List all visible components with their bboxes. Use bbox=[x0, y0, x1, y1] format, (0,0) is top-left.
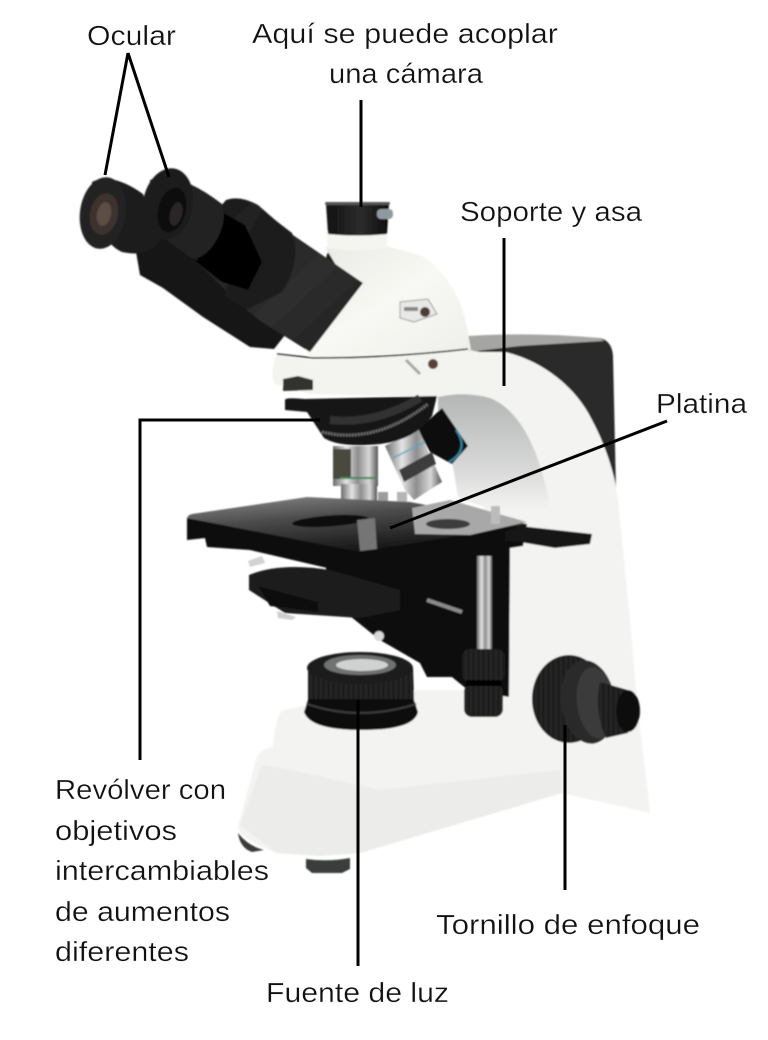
camera port bbox=[325, 202, 393, 236]
coarse focus knobs on column bbox=[462, 649, 505, 717]
black column block bbox=[325, 545, 510, 697]
lever and screw on the arm bbox=[406, 359, 438, 374]
label: platina: Platina bbox=[656, 388, 747, 419]
light source bbox=[304, 652, 418, 730]
label: fuente de luz: Fuente de luz bbox=[266, 977, 449, 1008]
objective: black bbox=[418, 408, 468, 464]
stage bbox=[187, 497, 527, 574]
revolver bbox=[285, 396, 437, 445]
leader line: cámara bbox=[360, 100, 362, 207]
rear black panel of the support bbox=[468, 337, 616, 490]
white support arm and back column bbox=[238, 352, 650, 856]
shaded inner arch bbox=[438, 394, 550, 511]
rack column bbox=[477, 556, 492, 651]
leader line: fuente de luz bbox=[356, 700, 360, 966]
tube collar bbox=[224, 210, 295, 310]
seam line of the head bbox=[277, 349, 468, 358]
label: cámara: Aquí se puede acoplar bbox=[252, 18, 558, 49]
grey top strip of the support bbox=[468, 334, 604, 352]
lower eyepiece tube bbox=[135, 225, 300, 349]
focus knob bbox=[532, 655, 640, 747]
leader line: soporte y asa bbox=[502, 238, 506, 386]
focusing barrel bbox=[196, 212, 262, 290]
leader lines: Ocular bbox=[105, 53, 169, 177]
soft shading on the base bbox=[240, 765, 562, 856]
microscope bbox=[75, 164, 650, 873]
eyepiece prism housing bbox=[196, 198, 363, 352]
label: cámara bbox=[252, 18, 558, 89]
head switch bbox=[400, 299, 437, 322]
arm knob bbox=[283, 376, 313, 391]
leader line: platina bbox=[390, 421, 667, 528]
label: soporte y asa: Soporte y asa bbox=[460, 196, 642, 227]
camera port collar bbox=[327, 232, 387, 250]
right eyecup bbox=[137, 164, 224, 258]
leader line: revólver bbox=[140, 420, 320, 760]
label: tornillo de enfoque: Tornillo de enfoque bbox=[436, 909, 700, 940]
white trinocular head bbox=[300, 246, 471, 358]
stage clips bbox=[378, 492, 407, 510]
objective: long right bbox=[385, 428, 442, 500]
slide holder bbox=[505, 526, 592, 548]
label: revólver: Revólver con bbox=[55, 774, 226, 805]
condenser bbox=[249, 567, 462, 641]
base feet bbox=[238, 833, 350, 873]
label: revólver: diferentes bbox=[55, 936, 189, 967]
objective: central bbox=[333, 446, 378, 510]
label: revólver: de aumentos bbox=[55, 896, 230, 927]
left eyecup bbox=[75, 174, 160, 254]
label: Ocular: Ocular bbox=[87, 20, 176, 51]
label: revólver bbox=[55, 774, 269, 967]
label: revólver: intercambiables bbox=[55, 855, 269, 886]
head knob behind tube bbox=[326, 246, 350, 274]
white nosepiece arm bbox=[273, 350, 500, 397]
label: revólver: objetivos bbox=[55, 815, 177, 846]
label: cámara: una cámara bbox=[329, 58, 483, 89]
leader line: tornillo de enfoque bbox=[564, 725, 566, 890]
